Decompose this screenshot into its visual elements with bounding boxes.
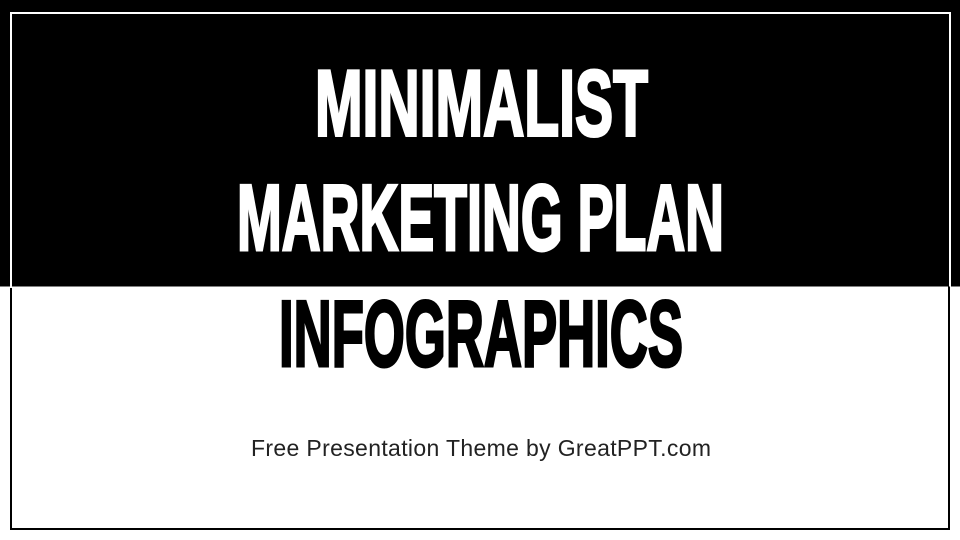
subtitle: Free Presentation Theme by GreatPPT.com [251,435,711,461]
panel: white bottom frame [11,286,949,529]
title line: Minimalist: MINIMALIST [315,50,648,155]
panel: black top band [0,0,960,286]
title [237,50,724,386]
